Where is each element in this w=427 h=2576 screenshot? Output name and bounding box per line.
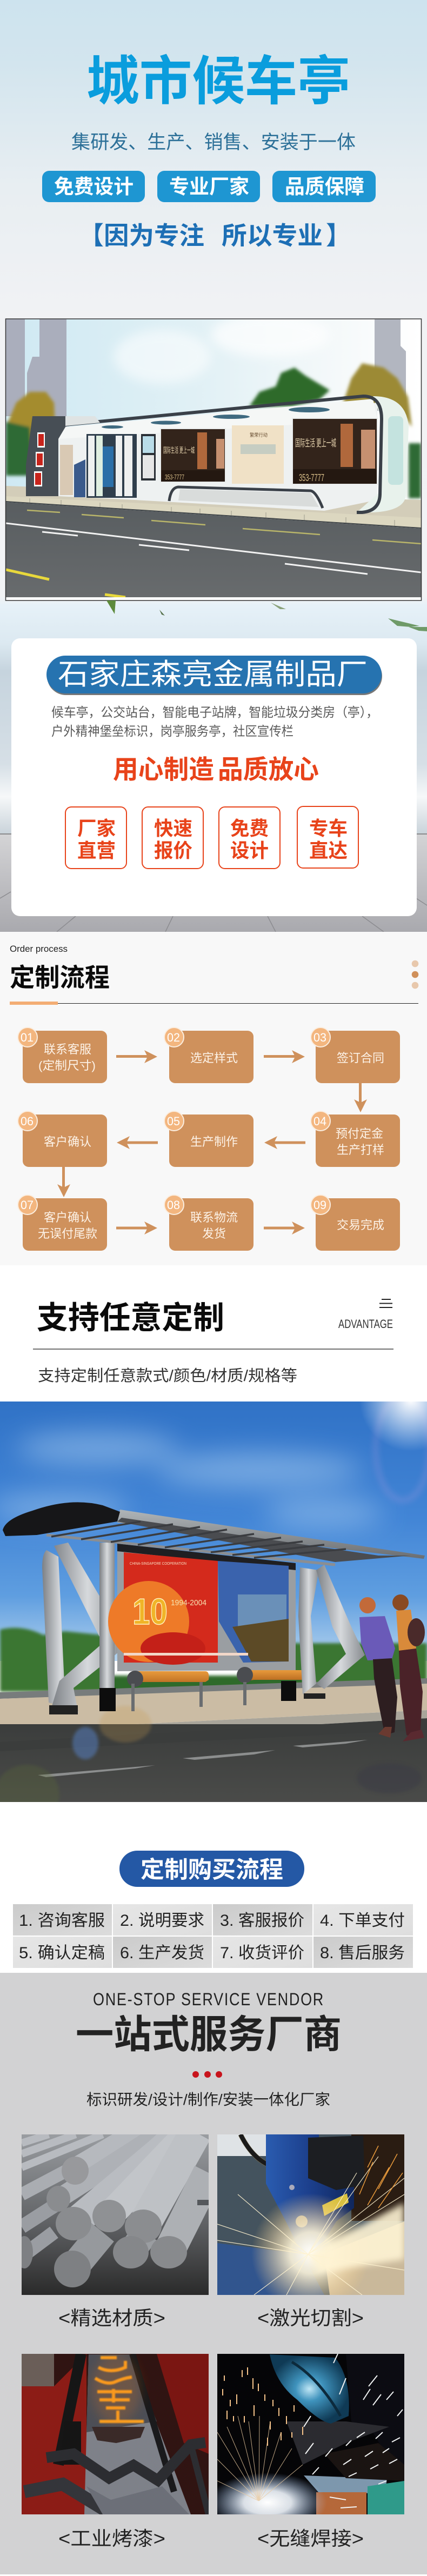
panel: purchase process	[13, 1851, 413, 1968]
badge: quality guarantee: 品质保障	[285, 176, 364, 198]
step 05	[164, 1111, 253, 1167]
step 06: 客户确认	[44, 1135, 91, 1149]
box: factory direct: 直营	[77, 839, 116, 862]
step 02: 选定样式	[190, 1051, 238, 1065]
pill heading: 定制购买流程	[141, 1857, 283, 1883]
step 03: 签订合同	[337, 1051, 384, 1065]
box: free design	[219, 807, 280, 869]
cell 2: 2. 说明要求	[120, 1912, 204, 1930]
red slogan	[113, 756, 319, 784]
ad panel	[117, 1544, 296, 1671]
step 04: 预付定金	[336, 1127, 383, 1140]
badge: free design: 免费设计	[54, 176, 134, 198]
heading: 支持任意定制	[37, 1300, 224, 1336]
box: direct delivery: 专车	[309, 817, 348, 839]
shelter legs	[42, 1550, 78, 1711]
photo: industrial paint curing	[22, 2354, 209, 2514]
factory name pill: 石家庄森亮金属制品厂	[58, 658, 368, 691]
benches	[138, 1671, 209, 1682]
panel: factory info card	[11, 638, 417, 916]
section heading: 定制流程	[10, 963, 110, 992]
photo: modern bus shelter: 国际生活 更上一城	[163, 446, 195, 455]
hero slogan: 所以专业	[222, 222, 323, 250]
badge: quality guarantee	[272, 171, 376, 202]
sub heading: 标识研发/设计/制作/安装一体化厂家	[86, 2091, 330, 2108]
panel: customization process	[0, 932, 427, 1265]
hero slogan	[79, 222, 351, 250]
trees	[6, 363, 421, 498]
photo: steel bus shelter with two women: CHINA-SINGAPORE COOPERATION	[130, 1562, 186, 1566]
buildings	[6, 319, 66, 427]
red slogan: 用心制造	[113, 756, 214, 784]
cell 7: 7. 收货评价	[220, 1944, 304, 1962]
product description: 候车亭，公交站台，智能电子站牌，智能垃圾分类房（亭），	[51, 705, 378, 720]
arrow 01 to 02	[116, 1050, 157, 1063]
feature boxes	[65, 806, 358, 869]
right legs	[298, 1567, 319, 1694]
step 04: 生产打样	[337, 1143, 384, 1157]
woman left	[359, 1597, 397, 1738]
cell 8	[313, 1937, 413, 1968]
box: free design: 设计	[230, 839, 269, 862]
step 09: 交易完成	[337, 1218, 384, 1232]
cell 3	[213, 1904, 312, 1936]
arrow 03 to 04	[354, 1083, 367, 1112]
hero title: 城市候车亭	[86, 51, 350, 111]
box: quick quote: 快速	[154, 817, 192, 839]
photo: modern bus shelter	[5, 313, 422, 600]
hero slogan: 因为专注	[104, 222, 204, 250]
lens flares	[72, 1727, 98, 1759]
step 08	[164, 1195, 253, 1251]
photo: steel bus shelter with two women: 10	[132, 1591, 168, 1632]
bench	[178, 489, 319, 507]
box: factory direct: 厂家	[77, 817, 116, 839]
arrow 04 to 05	[264, 1136, 305, 1149]
step 01: 联系客服	[44, 1043, 91, 1056]
decorative falling leaves	[106, 600, 427, 631]
locker	[86, 434, 137, 498]
step 07: 07	[21, 1198, 34, 1212]
poster right	[292, 418, 378, 485]
poster left	[160, 428, 226, 432]
photo: modern bus shelter: 繁荣行动	[250, 432, 268, 438]
step 04	[311, 1111, 400, 1167]
step 07	[18, 1195, 107, 1251]
step 07: 客户确认	[44, 1211, 91, 1224]
badge: professional factory: 专业厂家	[169, 176, 249, 198]
cell 4: 4. 下单支付	[320, 1912, 405, 1930]
arrow 07 to 08	[116, 1222, 157, 1234]
poster middle	[232, 425, 284, 484]
section eyebrow: Order process	[10, 944, 68, 954]
step 08: 发货	[202, 1227, 226, 1240]
step 01: 01	[21, 1031, 34, 1044]
hero subtitle: 集研发、生产、销售、安装于一体	[71, 132, 356, 153]
cell 6	[113, 1937, 212, 1968]
chinese heading: 一站式服务厂商	[76, 2013, 342, 2057]
photo: aluminium rods	[16, 2132, 209, 2295]
steps table	[13, 1904, 413, 1968]
shelter body	[58, 403, 377, 511]
description: 支持定制任意款式/颜色/材质/规格等	[38, 1367, 297, 1385]
cell 8: 8. 售后服务	[320, 1944, 405, 1962]
step 01	[18, 1027, 107, 1083]
badge: professional factory	[157, 171, 260, 202]
panel: one-stop service vendor	[0, 1973, 427, 2574]
hero slogan: 】	[326, 222, 351, 250]
cell 4	[313, 1904, 413, 1936]
road	[6, 502, 421, 597]
english heading: ONE-STOP SERVICE VENDOR	[93, 1990, 324, 2009]
photo: welding	[217, 2354, 404, 2514]
panel: any customization heading	[33, 1299, 393, 1385]
photo: steel bus shelter with two women	[0, 1402, 427, 1802]
step 09: 09	[313, 1198, 326, 1212]
step 03	[311, 1027, 400, 1083]
photo: steel bus shelter with two women: 1994-2004	[171, 1598, 206, 1607]
cell 5: 5. 确认定稿	[19, 1944, 105, 1962]
cell 1: 1. 咨询客服	[19, 1912, 105, 1930]
step 07: 无误付尾款	[38, 1227, 97, 1240]
small sign	[141, 434, 156, 481]
sidewalk	[6, 486, 421, 518]
box: quick quote: 报价	[154, 839, 192, 862]
arrow 02 to 03	[264, 1050, 305, 1063]
step 04: 04	[313, 1115, 326, 1128]
box: quick quote	[142, 807, 203, 869]
pill heading	[119, 1851, 304, 1887]
step 05: 生产制作	[190, 1135, 238, 1149]
cell 6: 6. 生产发货	[120, 1944, 204, 1962]
step 02	[164, 1027, 253, 1083]
step 09	[311, 1195, 400, 1251]
step 08: 08	[167, 1198, 180, 1212]
step 06: 06	[21, 1115, 34, 1128]
photo: modern bus shelter: 353-7777	[299, 472, 324, 483]
badge: free design	[42, 171, 145, 202]
red dots	[192, 2071, 222, 2078]
step 05: 05	[167, 1115, 180, 1128]
product description	[51, 705, 378, 739]
arrow 08 to 09	[264, 1222, 305, 1234]
cell 5	[13, 1937, 112, 1968]
advantage label: ADVANTAGE	[338, 1317, 393, 1331]
box: factory direct	[65, 807, 126, 869]
box: direct delivery	[297, 806, 358, 868]
product description: 户外精神堡垒标识，岗亭服务亭，社区宣传栏	[51, 724, 293, 739]
step 02: 02	[167, 1031, 180, 1044]
step 01: (定制尺寸)	[38, 1059, 96, 1072]
arrow 05 to 06	[117, 1136, 158, 1149]
icon: menu lines	[379, 1299, 392, 1307]
arrow 06 to 07	[57, 1167, 70, 1197]
caption: industrial paint: <工业烤漆>	[58, 2527, 165, 2550]
hedge	[0, 1628, 427, 1692]
hero badges	[42, 171, 376, 202]
caption: selected material: <精选材质>	[58, 2307, 165, 2329]
step 06	[18, 1111, 107, 1167]
box: free design: 免费	[230, 817, 269, 839]
cell 2	[113, 1904, 212, 1936]
ground	[0, 1678, 427, 1699]
photo: laser cutting	[217, 2134, 404, 2312]
road dashes	[38, 1740, 368, 1777]
panel: hero background	[0, 0, 427, 932]
step 08: 联系物流	[190, 1211, 238, 1224]
box: direct delivery: 直达	[309, 839, 348, 862]
cell 1	[13, 1904, 112, 1936]
heading dots	[412, 960, 418, 989]
woman right	[392, 1594, 425, 1741]
cell 3: 3. 客服报价	[220, 1912, 304, 1930]
caption: seamless welding: <无缝焊接>	[257, 2527, 364, 2550]
cell 7	[213, 1937, 312, 1968]
caption: laser cutting: <激光切割>	[257, 2307, 364, 2329]
step 03: 03	[313, 1031, 326, 1044]
photo: modern bus shelter: 国际生活 更上一城	[295, 438, 336, 449]
red slogan: 品质放心	[218, 756, 319, 784]
hero slogan: 【	[79, 222, 104, 250]
roof	[117, 1510, 425, 1559]
tower	[26, 416, 65, 496]
photo: modern bus shelter: 353-7777	[165, 473, 184, 481]
